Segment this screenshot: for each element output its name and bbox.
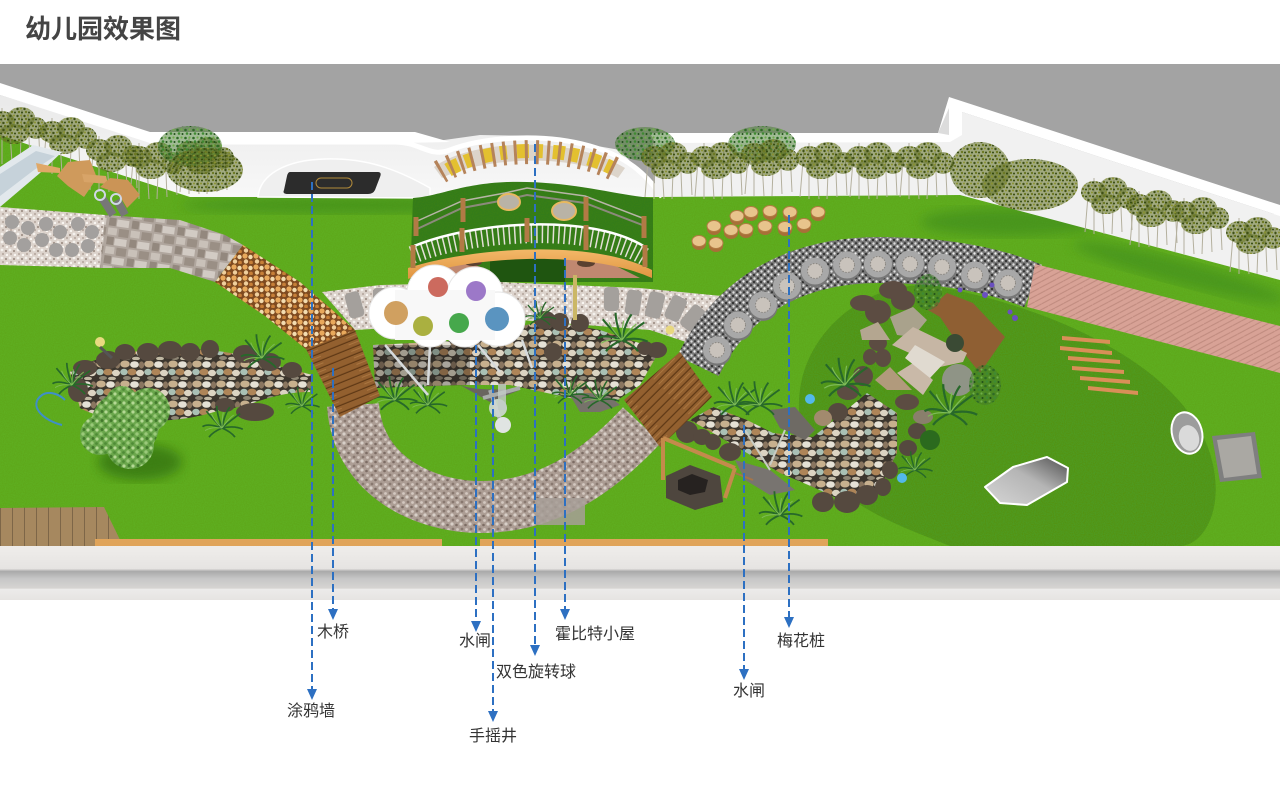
palette cloud shade structure xyxy=(369,265,532,395)
arrow: 水闸 centre xyxy=(471,345,481,632)
bamboo: left wall xyxy=(0,107,243,199)
wood deck xyxy=(0,507,123,546)
path: white pebble with pavers xyxy=(0,207,105,268)
timber kerbs xyxy=(95,539,828,547)
label: 霍比特小屋: 霍比特小屋 xyxy=(555,625,635,643)
road kerb xyxy=(0,546,1280,600)
grey neighbouring ground xyxy=(0,64,1280,214)
wood bridge: left xyxy=(306,330,380,417)
wood bridge: right xyxy=(624,352,712,447)
creek: right xyxy=(676,393,933,513)
label: 手摇井: 手摇井 xyxy=(469,727,517,745)
log stump seats xyxy=(692,206,825,252)
bridge front rail xyxy=(412,234,645,257)
label: 梅花桩: 梅花桩 xyxy=(777,632,825,650)
label: 水闸 centre: 水闸 xyxy=(459,632,491,650)
title: 幼儿园效果图 xyxy=(25,14,181,44)
path: herringbone brick xyxy=(1027,264,1280,373)
path: crazy paving xyxy=(100,215,243,282)
water sluice xyxy=(745,430,785,470)
creek: left xyxy=(68,340,312,421)
label: 双色旋转球: 双色旋转球 xyxy=(496,663,576,681)
arrow: 涂鸦墙 xyxy=(307,182,317,700)
boundary wall: right xyxy=(650,97,1280,280)
rockery waterfall xyxy=(837,281,1005,410)
label: 水闸 right: 水闸 xyxy=(733,682,765,700)
path: lower pebble U xyxy=(353,405,642,507)
path: central pebble walk xyxy=(322,282,732,345)
bridge deck xyxy=(408,249,652,279)
lamp xyxy=(666,326,674,334)
lawn xyxy=(0,130,1280,546)
water sluice balls xyxy=(805,394,907,483)
bamboo: right wall xyxy=(615,126,1280,274)
manhole cover xyxy=(1212,432,1262,482)
panel: site plan xyxy=(0,64,1280,600)
bridge rear rail xyxy=(415,195,645,230)
boundary wall: left xyxy=(0,83,662,197)
hand-cranked well xyxy=(663,438,753,510)
dark lawn mound xyxy=(799,285,1216,546)
hobbit house with bridge xyxy=(408,182,653,282)
arrow: 水闸 right xyxy=(739,425,749,680)
path: dark gravel arc with stepping stones xyxy=(698,250,1033,366)
label: 涂鸦墙: 涂鸦墙 xyxy=(287,702,335,720)
arrow: 梅花桩 xyxy=(784,215,794,628)
hose and lamp xyxy=(36,337,112,425)
play slide and picnic table xyxy=(0,145,140,215)
small paved slab xyxy=(535,498,585,525)
arrow: 手摇井 xyxy=(488,385,498,722)
arrow: 木桥 xyxy=(328,368,338,620)
green tree xyxy=(80,386,182,480)
boulder sculpture large xyxy=(985,457,1068,505)
yellow abacus wall xyxy=(434,145,625,178)
boulder sculpture small xyxy=(1167,409,1207,457)
arrow: 双色旋转球 xyxy=(530,144,540,656)
arrow: 霍比特小屋 xyxy=(560,258,570,620)
two-colour rotating ball xyxy=(483,384,520,433)
graffiti wall xyxy=(258,159,430,198)
path: log slices xyxy=(215,245,355,350)
bamboo lamp post xyxy=(573,275,577,320)
label: 木桥: 木桥 xyxy=(317,623,349,641)
creek: centre xyxy=(373,311,667,412)
timber step strips xyxy=(1060,336,1138,395)
planting beds xyxy=(52,274,1018,525)
